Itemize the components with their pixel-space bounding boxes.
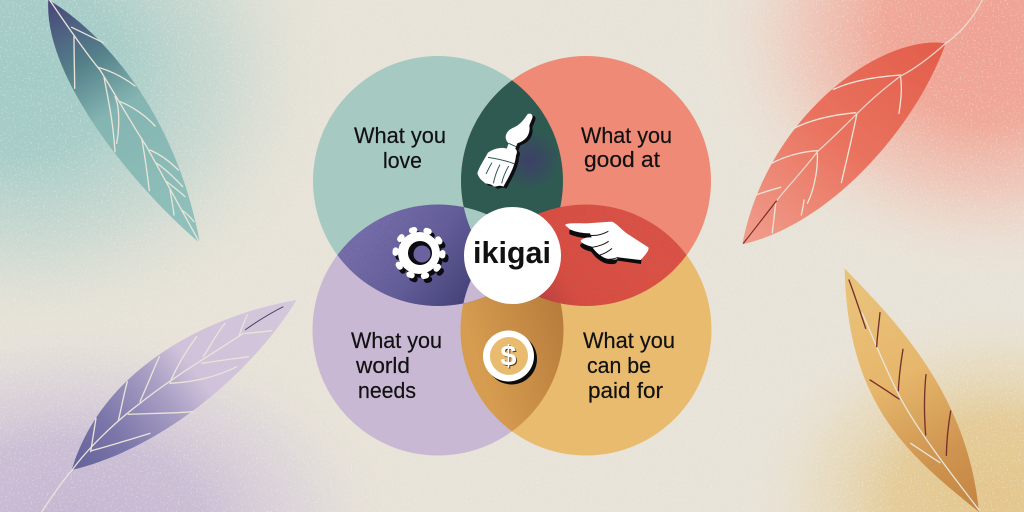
overlap: love and needs [338,204,487,306]
label: what you can be paid for [583,328,675,403]
overlap: love and good at [461,80,563,214]
icon: dollar coin: $ [501,342,518,374]
label: what you good at: good at [584,147,660,172]
label: what you love: What you [354,123,446,148]
label: what you world needs [351,328,442,403]
icon: paint brush [477,114,536,189]
label: what you can be paid for: What you [583,328,675,353]
venn diagram [310,50,715,460]
leaf: tan [845,268,979,512]
label: what you world needs: needs [358,378,416,403]
label: what you can be paid for: can be [587,353,651,378]
circle: what you love [313,56,563,306]
icon: dollar coin: $ [500,340,517,372]
circle: what you world needs [312,204,564,456]
label: what you good at [581,123,672,172]
circle: what you good at [461,56,711,306]
leaf: lilac [42,300,297,512]
centre circle [464,207,561,304]
icon: pointing hand [565,222,649,264]
centre sliver: lilac [463,280,486,304]
centre sliver: teal [464,207,487,230]
label: what you world needs: What you [351,328,442,353]
leaf: teal [48,0,200,243]
circle: what you can be paid for [460,204,712,456]
leaf: salmon [742,0,982,244]
label: what you love [354,123,446,173]
label: what you good at: What you [581,123,672,148]
label: what you love: love [383,148,422,173]
label: what you can be paid for: paid for [588,378,663,403]
icon: dollar coin [483,330,537,384]
label: what you world needs: world [355,353,410,378]
icon: gear [396,230,446,280]
overlap: needs and paid [460,296,564,432]
heading: ikigai: ikigai [473,235,551,270]
overlap: good at and paid [538,204,686,306]
